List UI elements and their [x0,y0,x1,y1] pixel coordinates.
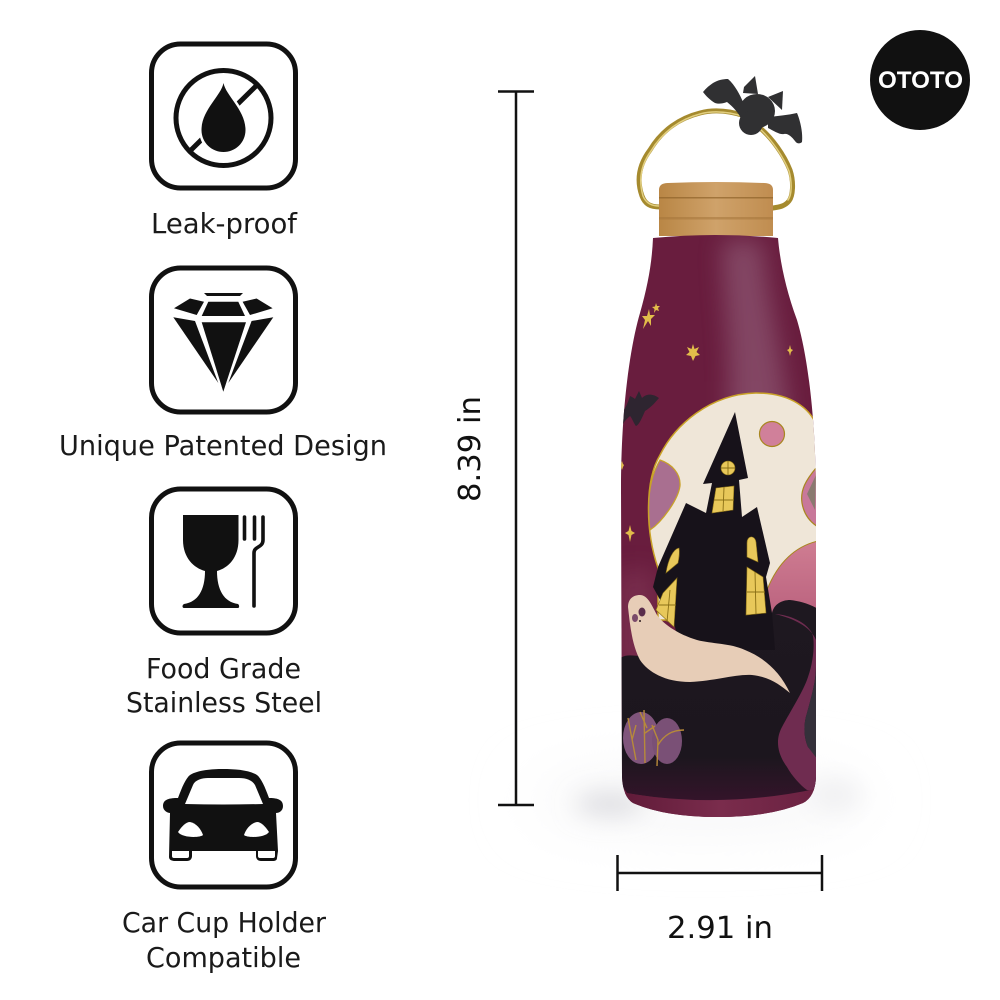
height label: 8.39 in [453,396,488,502]
purple road [776,614,816,790]
haunted house [653,412,775,650]
height dimension line [498,92,534,805]
highlight on bottle shoulder [722,240,790,420]
label: Car Cup Holder Compatible: Car Cup Holder [122,907,327,939]
logo badge: OTOTO: OTOTO [878,67,963,94]
label: Food Grade Stainless Steel: Food Grade [146,653,301,685]
windows [656,461,766,627]
background shadow [530,774,870,826]
bottle [615,76,825,825]
icon: diamond [152,268,296,412]
width label: 2.91 in [667,911,773,946]
black hill [618,600,820,801]
moon crater: left [649,460,680,530]
feature: patented design [59,268,387,462]
feature: leak-proof [151,44,298,240]
pink hill [768,541,816,613]
label: Car Cup Holder Compatible: Compatible [146,942,301,974]
label: Food Grade Stainless Steel: Stainless Steel [126,687,322,719]
label: Unique Patented Design: Unique Patented Design [59,430,387,462]
purple bush [623,710,684,766]
moon [648,393,820,620]
icon: no-drip drop [152,44,296,188]
brass ring handle [639,111,793,208]
moon crater: right [802,468,818,527]
moon crater: top [760,422,784,446]
bottle base band [625,790,814,817]
dark right edge panel [804,669,816,758]
bat graphic on moon crater [807,475,816,510]
gold stars [621,303,793,542]
ghost [628,595,790,693]
width dimension line [618,855,822,891]
bat topper [703,76,802,143]
label: Leak-proof: Leak-proof [151,208,298,240]
bat silhouette on bottle [622,391,659,426]
feature: food grade [126,489,322,719]
bamboo cap [659,182,773,236]
bottle body [615,230,825,825]
icon: glass and fork [152,489,296,633]
logo badge: OTOTO [870,30,970,130]
icon: car [152,743,296,887]
feature: car cup holder [122,743,335,974]
